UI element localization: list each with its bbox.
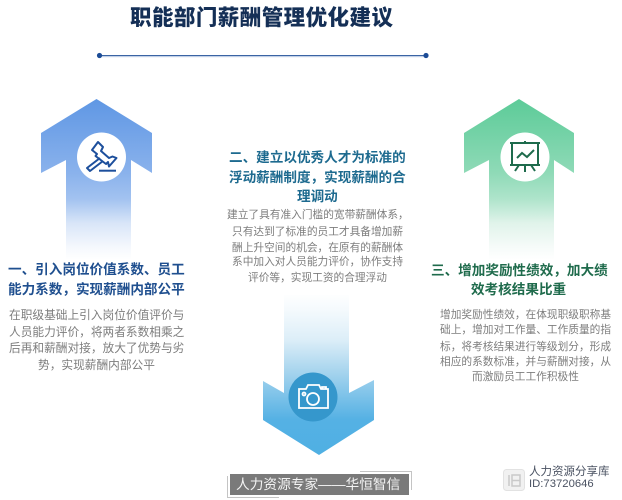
footer frame lines <box>228 472 412 498</box>
icon: gavel in white circle <box>77 132 126 182</box>
heading: right: 效考核结果比重 <box>471 282 566 297</box>
watermark logo <box>504 470 524 490</box>
heading: left <box>8 262 185 297</box>
panel: left text <box>8 262 185 372</box>
heading: right: 三、增加奖励性绩效，加大绩 <box>431 263 608 278</box>
watermark text: ID:73720646 <box>529 478 594 490</box>
text block: right <box>440 308 611 383</box>
text block: left: 后再和薪酬对接，放大了优势与劣 <box>9 342 184 355</box>
watermark text: 人力资源分享库 <box>529 466 610 478</box>
text block: left: 在职级基础上引入岗位价值评价与 <box>9 309 184 322</box>
heading: right <box>431 263 608 297</box>
text block: right: 相应的系数标准，并与薪酬对接，从 <box>440 356 611 368</box>
panel: center text <box>227 150 409 284</box>
text block: left: 人员能力评价，将两者系数相乘之 <box>9 326 184 339</box>
text block: center: 评价等，实现工资的合理浮动 <box>248 272 387 284</box>
divider line <box>97 53 429 58</box>
heading: center: 理调动 <box>297 189 338 204</box>
icon: presentation board in white circle <box>500 132 550 182</box>
heading: center: 浮动薪酬制度，实现薪酬的合 <box>229 170 406 185</box>
icon: camera in blue circle <box>288 372 338 422</box>
arrow: center blue down <box>263 295 374 455</box>
heading: center <box>229 150 406 204</box>
text block: center: 建立了具有准入门槛的宽带薪酬体系， <box>227 209 409 221</box>
footer grey box <box>230 474 409 495</box>
text block: left: 势，实现薪酬内部公平 <box>38 359 155 372</box>
text block: center: 系中加入对人员能力评价，协作支持 <box>232 256 403 268</box>
text block: center: 只有达到了标准的员工才具备增加薪 <box>232 226 403 238</box>
text block: left <box>9 308 184 372</box>
footer text: 人力资源专家——华恒智信 <box>236 477 400 492</box>
heading: left: 能力系数，实现薪酬内部公平 <box>8 282 185 297</box>
title: 职能部门薪酬管理优化建议 <box>130 6 393 30</box>
text block: center: 酬上升空间的机会，在原有的薪酬体 <box>232 242 403 254</box>
text block: right: 础上，增加对工作量、工作质量的指 <box>440 324 611 336</box>
text block: right: 标，将考核结果进行等级划分，形成 <box>440 341 611 353</box>
arrow: right green up <box>464 99 574 260</box>
text block: right: 增加奖励性绩效，在体现职级职称基 <box>440 309 611 321</box>
panel: right text <box>431 263 611 383</box>
arrow: left blue up <box>41 99 152 260</box>
heading: left: 一、引入岗位价值系数、员工 <box>8 262 185 277</box>
watermark text <box>529 465 610 490</box>
text block: right: 而激励员工工作积极性 <box>472 371 579 383</box>
heading: center: 二、建立以优秀人才为标准的 <box>229 150 406 165</box>
text block: center <box>227 208 409 284</box>
